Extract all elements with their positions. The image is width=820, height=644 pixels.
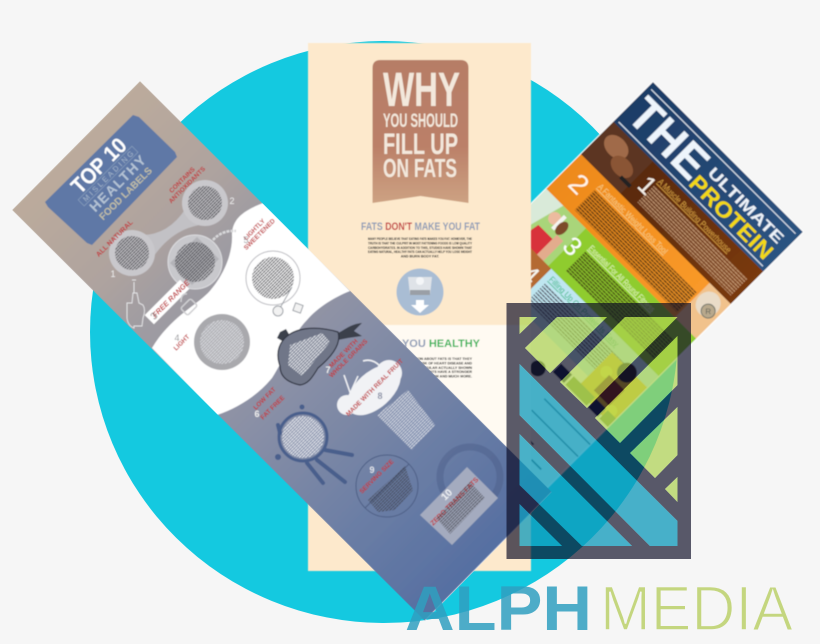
body text: EATING NATURAL, HEALTHY FATS CAN ACTUALLY HELP YOU LOSE WEIGHT	[368, 250, 473, 254]
dark round badge	[526, 357, 549, 380]
tag: free range: 3	[149, 310, 161, 322]
white wave band	[152, 203, 350, 415]
body text lines	[637, 185, 748, 296]
connector between circles 1 and 2	[146, 212, 198, 254]
infographic: top 10 misleading healthy food labels	[12, 81, 552, 621]
body text: A COMMON MISCONCEPTION ABOUT FATS IS THAT THEY	[372, 357, 473, 361]
title ribbon	[372, 60, 468, 203]
wordmark: media: MEDIA	[600, 574, 793, 644]
infographic: why you should fill up on fats	[308, 43, 531, 571]
circle 2: antioxidants	[182, 180, 228, 226]
title: top 10: TOP 10	[66, 133, 132, 199]
number 5: 5	[243, 235, 249, 245]
circle 1: all natural	[109, 230, 155, 276]
poster pale section	[308, 325, 531, 495]
number 8: 8	[377, 391, 383, 401]
label: lightly sweetened: SWEETENED	[243, 218, 277, 252]
label: low fat: LOW FAT	[252, 386, 278, 412]
photo: stomach	[675, 283, 731, 339]
band 2: weight loss	[546, 154, 731, 339]
circle 9: serving size	[356, 455, 418, 517]
infographic: the ultimate protein	[348, 82, 803, 537]
blue tiles	[520, 364, 678, 546]
title: food labels: FOOD LABELS	[98, 165, 155, 223]
icon: tied bag	[277, 323, 362, 385]
green tiles	[520, 317, 678, 502]
photo: food	[473, 226, 551, 304]
number 10: 10	[439, 487, 455, 503]
circle 4: light	[194, 314, 250, 370]
heading: keep you healthy: FATS KEEP YOU HEALTHY	[339, 338, 481, 350]
body text	[368, 237, 473, 259]
label: made with whole grains: MADE WITH	[328, 338, 360, 370]
number 7: 7	[325, 365, 331, 375]
icon: fist with syringe	[127, 280, 144, 328]
body text: AND BURN BODY FAT.	[401, 255, 440, 259]
header band	[613, 82, 803, 272]
label: made with real fruit: MADE WITH REAL FRUIT	[345, 358, 405, 418]
band 3: all-round	[509, 189, 696, 376]
body text: BLOOD FLOW AND MUCH MORE.	[414, 375, 472, 379]
tag: free range: FREE RANGE	[150, 278, 192, 319]
nutrition text lines	[506, 397, 591, 482]
circle 5: lightly sweetened	[246, 251, 300, 305]
number 9: 9	[369, 465, 375, 475]
label: serving size: SERVING SIZE	[358, 458, 396, 495]
photo: woman exercising	[509, 189, 586, 266]
poster cream upper	[308, 43, 531, 571]
icon: dripping stain	[275, 404, 352, 483]
label: lightly sweetened: LIGHTLY	[243, 217, 267, 242]
number 1: 1	[632, 170, 663, 201]
title: ultimate: ULTIMATE	[704, 165, 787, 248]
body text: CARBOHYDRATES. IN ADDITION TO THIS, STUDIES HAVE SHOWN THAT	[368, 246, 473, 250]
circle 3: free range	[168, 235, 222, 289]
number 6: 6	[254, 409, 260, 419]
body text: HEALTHY FATS HAVE A STRONGER	[410, 370, 472, 374]
tire tread circle	[440, 447, 500, 507]
body text: CARDIOVASCULAR ACTUALLY SHOWN	[404, 366, 472, 370]
body text lines	[566, 252, 674, 359]
heading: fats don't make you fat: FATS DON'T MAKE YOU FAT	[361, 221, 480, 233]
title: misleading: MISLEADING	[81, 149, 136, 203]
label: zero trans fats: ZERO TRANS FATS	[430, 476, 481, 527]
number 2: 2	[229, 196, 235, 206]
label: fat free: FAT FREE	[260, 394, 287, 421]
wordmark: alph: ALPH	[405, 574, 592, 644]
buttons row	[553, 363, 616, 427]
poster base	[12, 81, 552, 621]
title ticket	[45, 115, 177, 245]
icon: spoon and sugar cubes	[273, 287, 303, 316]
logo mark: green and blue lattice	[506, 303, 691, 559]
title: fill up: FILL UP	[383, 128, 458, 161]
label: contains antioxidants: CONTAINS	[168, 166, 197, 195]
icon: fruit cloud	[336, 358, 403, 416]
chain	[213, 231, 236, 240]
title: protein: PROTEIN	[684, 170, 778, 264]
tag 10	[420, 467, 498, 545]
tag 10 body text	[436, 482, 485, 534]
body text: TRUTH IS THAT THE CULPRIT IN MOST FATTENING FOODS IS LOW QUALITY	[368, 241, 472, 245]
poster sheet	[348, 82, 803, 537]
heading: A Muscle Building Powerhouse	[656, 177, 733, 255]
icon: scale with down arrow	[396, 268, 444, 316]
heading: A Fantastic Weight Loss Tool	[596, 182, 669, 256]
label: light: LIGHT	[173, 334, 191, 352]
title: you should: YOU SHOULD	[383, 111, 458, 132]
dark frame and stripes	[506, 303, 691, 559]
number 3: 3	[557, 230, 588, 262]
text block 8	[377, 390, 435, 450]
number 2: 2	[562, 168, 595, 200]
heading: Essential For All Round Fitness	[587, 244, 657, 314]
body text: RAISE YOUR RISK OF HEART DISEASE AND	[395, 361, 472, 365]
band 4: filling up	[473, 226, 659, 412]
white edge line	[425, 492, 552, 621]
heading: Filling Up On Protein Is Easy	[547, 275, 620, 349]
body text: MANY PEOPLE BELIEVE THAT EATING FATS MAKES YOU FAT. HOWEVER, THE	[368, 237, 472, 241]
title: the: THE	[618, 87, 720, 189]
band 1: muscle building	[581, 122, 763, 304]
body text lines	[575, 190, 697, 313]
label: contains antioxidants: ANTIOXIDANTS	[168, 165, 208, 205]
label: all natural: ALL NATURAL	[95, 219, 135, 259]
number 4: 4	[174, 333, 180, 343]
registered mark: R	[705, 307, 711, 316]
label: made with whole grains: WHOLE GRAINS	[328, 338, 370, 379]
title: healthy: HEALTHY	[86, 152, 149, 215]
number 4: 4	[514, 259, 546, 290]
number 1: 1	[110, 269, 116, 279]
title: on fats: ON FATS	[383, 153, 457, 183]
background circle	[90, 41, 678, 623]
icon: padlock	[181, 294, 197, 315]
photo: muscles	[581, 122, 654, 195]
registered mark	[698, 301, 718, 321]
photo: woman with lemons	[575, 348, 652, 424]
body text	[372, 357, 473, 379]
title: why: WHY	[383, 64, 460, 117]
body text lines	[527, 283, 627, 383]
